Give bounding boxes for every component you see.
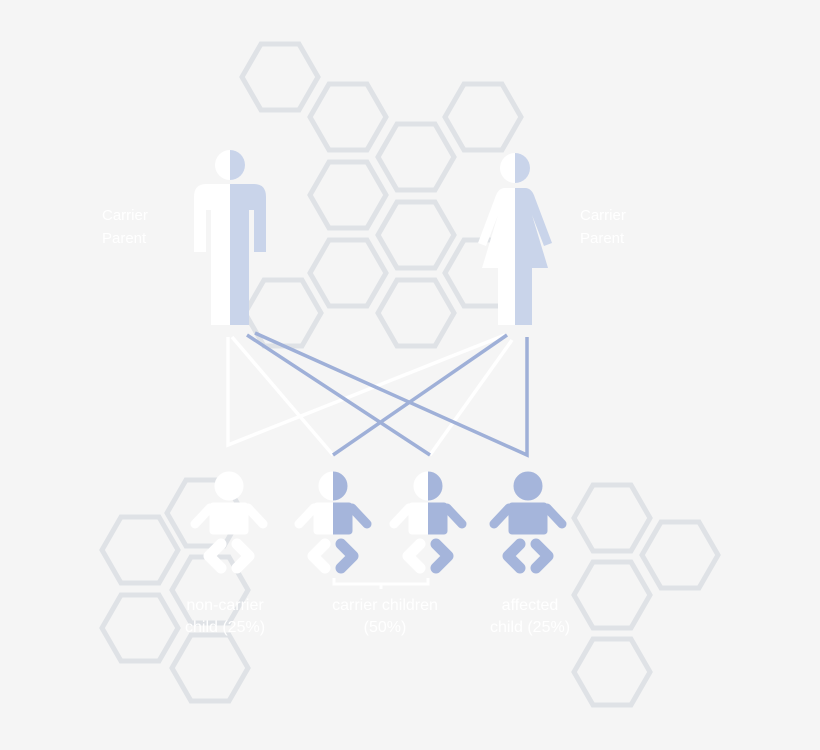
label: non-carrier child: non-carrier (186, 597, 264, 614)
bracket (334, 578, 428, 589)
icon: non-carrier baby (195, 472, 263, 568)
icon: affected baby (494, 472, 562, 568)
label: non-carrier child: child (25%) (185, 619, 265, 636)
icon: carrier mother (478, 153, 552, 325)
label: affected child: affected (502, 597, 558, 614)
inheritance lines (228, 333, 527, 455)
text: Parent (102, 230, 147, 247)
text: Parent (580, 230, 625, 247)
label: affected child: child (25%) (490, 619, 570, 636)
hexagon background pattern (102, 44, 718, 705)
label: carrier parent right: Carrier (580, 207, 626, 224)
icon: carrier baby 1 (299, 472, 367, 568)
label: carrier children: carrier children (332, 597, 438, 614)
label: carrier parent left: Carrier (102, 207, 148, 224)
label: carrier children: (50%) (364, 619, 406, 636)
icon: carrier baby 2 (394, 472, 462, 568)
icon: carrier father (194, 150, 266, 325)
